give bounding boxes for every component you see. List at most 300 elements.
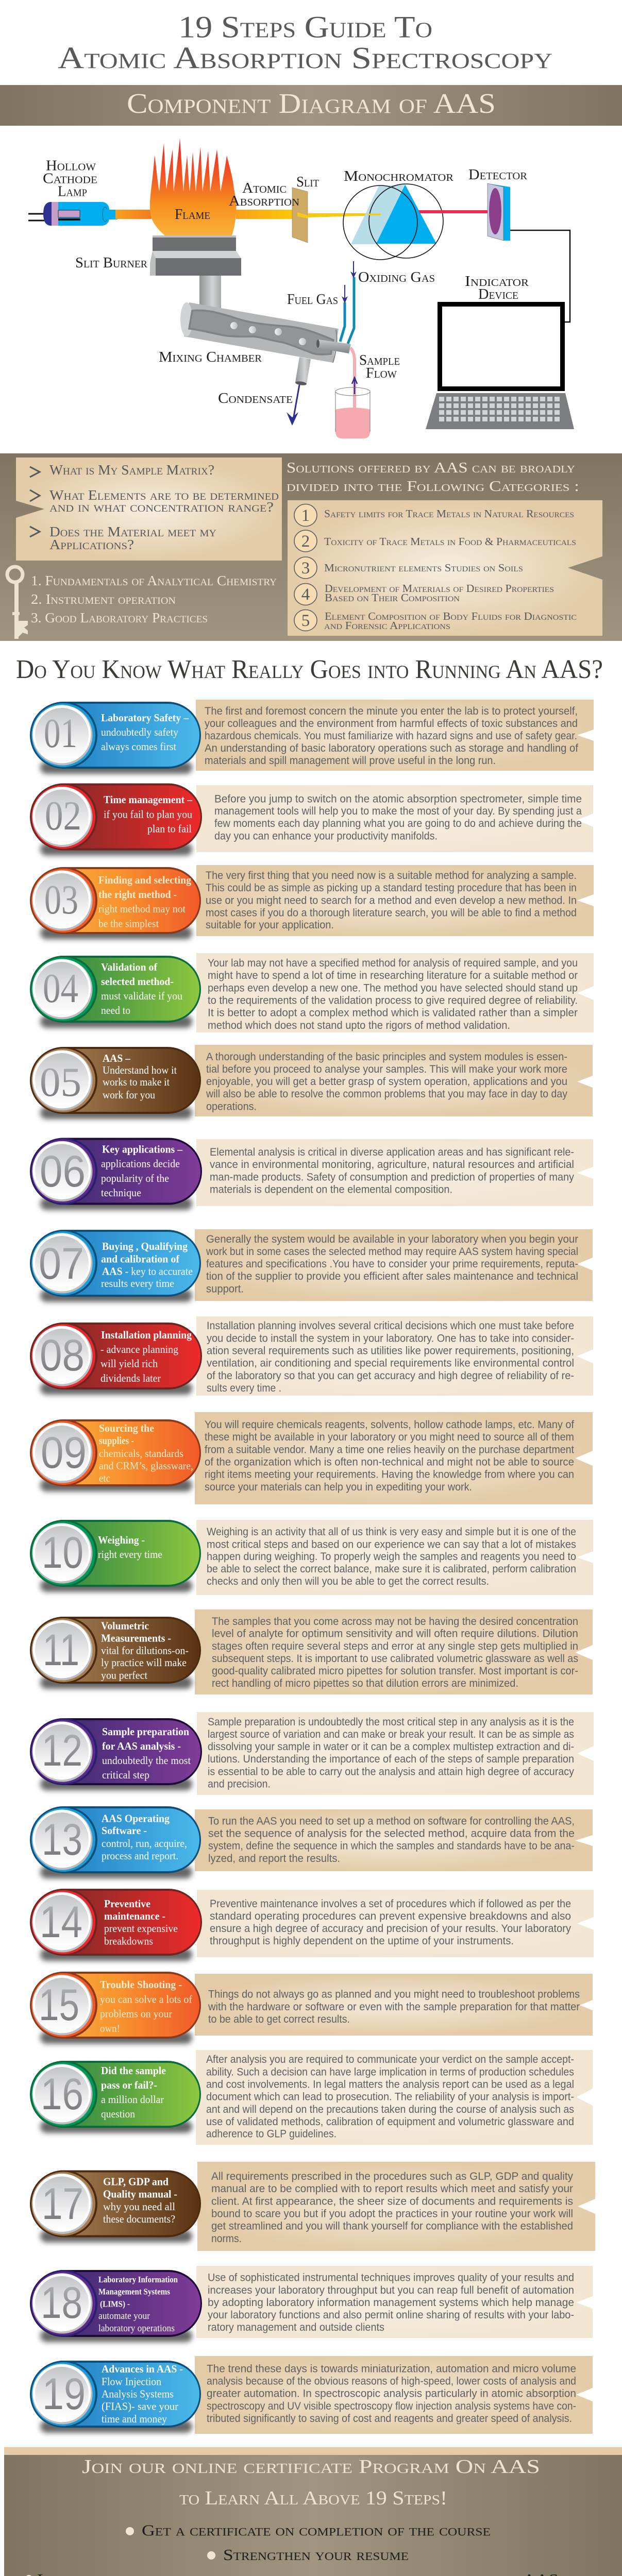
pipe: sample capillary (350, 348, 355, 412)
pill 18: (LIMS) - (100, 2299, 130, 2309)
pill 17 (30, 2170, 201, 2242)
pill 12: 12 (42, 1726, 82, 1775)
description 11: The samples that you come across may not be having the desired concentration (212, 1616, 578, 1628)
pill 01 (30, 702, 201, 774)
pill 12: Sample preparation (102, 1725, 189, 1738)
pill 17: Quality manual - (103, 2188, 177, 2200)
pill 05: AAS – (103, 1052, 130, 1064)
step 05 (30, 1045, 593, 1119)
description 05 (195, 1045, 593, 1116)
heading: do you know: Do You Know What Really Goes into Running An AAS? (16, 655, 603, 684)
description 18: your laboratory functions and also permit online sharing of results with your labo- (208, 2309, 574, 2321)
panel: solution categories (288, 500, 602, 636)
list: course benefits: Strengthen your resume (223, 2546, 409, 2564)
panel: solution categories: Development of Materials of Desired Properties (325, 582, 554, 595)
description 02 (196, 785, 593, 852)
pill 04: selected method- (101, 975, 174, 988)
pill 03: the right method - (98, 888, 177, 901)
diagram labels: Slit Burner (75, 255, 148, 271)
description 18: by adopting laboratory information management systems which help manage (208, 2297, 574, 2309)
description 12: and precision. (208, 1778, 271, 1790)
description 07: work but in some cases the selected method may require AAS system having special (206, 1246, 578, 1258)
step 08 (30, 1316, 593, 1396)
step 06 (30, 1138, 593, 1210)
pill 14 (30, 1889, 202, 1961)
diagram labels: Device (478, 286, 518, 302)
panel: solution categories: 5 (301, 612, 310, 630)
panel: solution categories: 1 (301, 506, 310, 525)
description 10: checks and only then will you be able to get the correct results. (207, 1575, 489, 1587)
description 07: tion of the supplier to provide you efficient after sales maintenance and technical (206, 1270, 578, 1282)
description 12: Sample preparation is undoubtedly the most critical step in any analysis as it is the (208, 1716, 574, 1728)
pill 07: results every time (101, 1277, 174, 1290)
pill 19: time and money (102, 2413, 167, 2425)
pill 16: pass or fail?- (101, 2079, 157, 2091)
pill 11: ly practice will make (101, 1656, 187, 1669)
pill 12: for AAS analysis - (102, 1740, 181, 1752)
description 08 (196, 1316, 593, 1396)
description 11: stages often require several steps and error at any single step gets multiplied in (212, 1640, 578, 1652)
diagram labels: Flow (366, 365, 397, 381)
description 17: All requirements prescribed in the procedures such as GLP, GDP and quality (211, 2171, 573, 2182)
description 13 (195, 1809, 593, 1871)
pill 04: Validation of (101, 961, 158, 973)
icon: key (7, 567, 28, 639)
icon: flame (150, 138, 236, 235)
description 08: you decide to install the system in your laboratory. One has to take into consider- (207, 1332, 574, 1345)
icon: sample beaker (335, 387, 370, 438)
pill 15: problems on your (100, 2007, 172, 2020)
pill 12: critical step (102, 1769, 149, 1781)
description 03 (196, 865, 594, 936)
description 07: Generally the system would be available in your laboratory when you begin your (206, 1233, 578, 1245)
description 19 (195, 2356, 593, 2434)
diagram labels: Detector (468, 166, 528, 183)
panel: key questions: Does the Material meet my (49, 524, 216, 539)
pill 19: (FIAS)- save your (102, 2400, 178, 2413)
diagram labels: Mixing Chamber (159, 349, 262, 365)
pill 14: Preventive (104, 1897, 150, 1910)
description 09: source your materials can help you in expediting your work. (205, 1481, 472, 1493)
title (58, 10, 552, 75)
description 13: To run the AAS you need to set up a method on software for controlling the AAS, (208, 1816, 575, 1827)
light beam: red (418, 210, 498, 213)
pill 08: will yield rich (100, 1357, 158, 1369)
description 17 (197, 2162, 595, 2251)
icon: slit (292, 188, 308, 243)
icon: monochromator (343, 184, 443, 260)
pill 01: Laboratory Safety – (101, 711, 189, 724)
description 04: It is better to adopt a complex method which is validated rather than a simpler (208, 1007, 578, 1019)
description 05: enjoyable, you will get a better grasp of system operation, applications and you (206, 1076, 567, 1088)
pill 19: Analysis Systems (102, 2387, 174, 2400)
pill 16: Did the sample (101, 2064, 166, 2077)
description 15: Things do not always go as planned and you might need to troubleshoot problems (208, 1989, 580, 2001)
diagram labels: Condensate (218, 390, 293, 406)
heading: join the program: Join our online certificate Program On AAS (82, 2456, 540, 2478)
step 01 (30, 700, 594, 774)
description 10: Weighing is an activity that all of us think is very easy and simple but it is one of the (207, 1526, 576, 1538)
description 18: increases your laboratory throughput but you can reap full benefit of automation (208, 2284, 574, 2296)
pill 05: Understand how it (103, 1064, 177, 1076)
step 16 (30, 2050, 593, 2145)
description 18: Use of sophisticated instrumental techniques improves quality of your results and (208, 2272, 574, 2284)
icon: indicator monitor (440, 304, 563, 388)
pill 19: Flow Injection (102, 2375, 161, 2387)
description 16: and cost involvements. In legal matters the analysis report can be used as a legal (206, 2078, 574, 2091)
description 16: After analysis you are required to communicate your verdict on the sample accept- (206, 2054, 574, 2065)
pill 10 (30, 1520, 201, 1592)
pill 02: plan to fail (147, 822, 192, 835)
step 14 (30, 1889, 594, 1961)
pill 06: Key applications – (102, 1143, 182, 1155)
description 11: good-quality calibrated micro pipettes for solution transfer. Most important is cor- (212, 1665, 578, 1677)
wire: detector to indicator (510, 230, 570, 322)
description 19: tributed significantly to saving of cost and reagents and greater speed of analysis. (207, 2413, 572, 2425)
description 08: ation several requirements such as utilities like power requirements, positioning, (207, 1345, 574, 1357)
icon: keyboard (426, 393, 574, 429)
description 02: Before you jump to switch on the atomic absorption spectrometer, simple time (214, 793, 582, 805)
pill 10: 10 (42, 1528, 83, 1578)
heading: solutions: divided into the Following Categories : (287, 478, 579, 495)
description 06: Elemental analysis is critical in diverse application areas and has significant rele- (210, 1146, 574, 1158)
pipes: fuel and oxidant (340, 277, 354, 344)
pill 04: 04 (43, 966, 78, 1011)
description 16 (196, 2050, 593, 2145)
pill 13: Software - (102, 1824, 147, 1837)
description 10: happen during weighing. To properly weigh the samples and reagents you need to (207, 1551, 576, 1563)
pill 15: you can solve a lots of (100, 1993, 192, 2005)
pill 14: prevent expensive (104, 1922, 178, 1935)
description 06 (196, 1139, 593, 1206)
panel: solution categories: 2 (301, 532, 310, 551)
description 06: materials is dependent on the elemental composition. (210, 1184, 452, 1195)
icon: detector (487, 183, 510, 241)
pill 03 (30, 867, 201, 939)
pill 08: Installation planning (101, 1329, 192, 1341)
panel: key questions: and in what concentration range? (49, 499, 274, 515)
pill 07: and calibration of (101, 1253, 180, 1265)
pill 11: Measurements - (101, 1632, 171, 1645)
step 03 (30, 865, 594, 939)
description 17: client. At first appearance, the sheer size of documents and requirements is (211, 2196, 573, 2207)
description 02: few moments each day planning what you are going to do and achieve during the (214, 818, 582, 829)
pill 13: process and report. (102, 1850, 178, 1862)
panel: solution categories: Safety limits for Trace Metals in Natural Resources (324, 507, 574, 520)
pill 13: AAS Operating (102, 1812, 170, 1825)
description 17: manual are to be complied with to report results which meet and satisfy your (211, 2183, 573, 2195)
description 09: these might be available in your laboratory or you might need to source all of them (205, 1431, 574, 1443)
panel: key questions: Applications? (49, 537, 134, 552)
pill 02: 02 (45, 793, 81, 839)
description 09: You will require chemicals reagents, solvents, hollow cathode lamps, etc. Many of (205, 1419, 574, 1431)
pill 08: 08 (40, 1331, 85, 1380)
pill 07: 07 (39, 1239, 84, 1289)
step 07 (30, 1229, 593, 1302)
arrow: condensate drain (287, 385, 299, 426)
pill 13: 13 (42, 1815, 82, 1865)
pill 07: Buying , Qualifying (102, 1240, 188, 1252)
pill 19: 19 (42, 2369, 86, 2419)
pill 09: supplies - (99, 1434, 134, 1447)
description 04: perhaps even develop a new one. The method you have selected should stand up (208, 982, 578, 994)
pill 04 (30, 956, 201, 1028)
description 12: largest source of variation and can make or break your result. It can be as simple as (208, 1728, 574, 1740)
pill 14: 14 (40, 1897, 82, 1947)
pill 12 (30, 1718, 202, 1790)
arrows: gas inflow (345, 261, 354, 302)
description 12 (197, 1712, 594, 1795)
pill 18: automate your (98, 2311, 150, 2321)
pill 17: 17 (42, 2179, 83, 2229)
description 17: get streamlined and you will thank yourself for compliance with the established (211, 2221, 573, 2232)
step 10 (30, 1520, 593, 1595)
step 09 (30, 1412, 593, 1504)
icon: burner stem (199, 276, 221, 313)
pill 05 (30, 1047, 201, 1119)
pill 16 (30, 2061, 201, 2133)
step 12 (30, 1712, 594, 1795)
step 18 (30, 2266, 593, 2342)
pill 11: vital for dilutions-on- (101, 1645, 189, 1657)
description 12: lutions. Understanding the importance of each of the steps of sample preparation (208, 1753, 574, 1765)
pill 18: Laboratory Information (98, 2275, 178, 2284)
panel: questions and solutions (0, 453, 622, 641)
diagram labels: Monochromator (344, 168, 454, 184)
heading: solutions (287, 460, 579, 495)
panel: key questions (16, 457, 282, 561)
pill 11 (30, 1617, 201, 1689)
icon: mixing chamber (180, 302, 351, 363)
pill 19 (30, 2361, 201, 2433)
description 19: analysis because of the obvious reasons of high-speed, lower costs of analysis and (207, 2375, 576, 2387)
heading: join the program (82, 2456, 540, 2509)
pill 14: breakdowns (104, 1935, 153, 1947)
pill 06: applications decide (101, 1157, 180, 1170)
description 15: to be able to get correct results. (208, 2013, 350, 2025)
pill 08: dividends later (100, 1372, 161, 1384)
description 04: to the requirements of the validation process to give required degree of reliability. (208, 994, 578, 1007)
pill 09: 09 (41, 1428, 87, 1478)
pill 09: and CRM’s, glassware, (99, 1460, 193, 1472)
pill 18: Management Systems (98, 2286, 170, 2297)
pill 16: a million dollar (101, 2093, 164, 2106)
description 01: your colleagues and the environment from harmful effects of toxic substances and (205, 718, 578, 730)
list: core skills (31, 573, 277, 625)
pill 03: be the simplest (98, 917, 159, 929)
pill 17: why you need all (103, 2200, 175, 2213)
pill 15: Trouble Shooting - (100, 1978, 182, 1991)
description 19: The trend these days is towards miniaturization, automation and micro volume (207, 2363, 576, 2375)
description 11 (195, 1609, 593, 1694)
pill 04: must validate if you (101, 990, 182, 1002)
pill 19: Advances in AAS - (102, 2363, 183, 2375)
description 12: is essential to be able to carry out the analysis and attain high degree of accuracy (208, 1766, 574, 1777)
pill 03: 03 (44, 877, 78, 923)
list: course benefits (25, 2521, 596, 2576)
panel: key questions: What Elements are to be determined (49, 487, 279, 503)
pill 05: 05 (40, 1060, 81, 1105)
diagram labels: Lamp (58, 183, 87, 200)
title: Atomic Absorption Spectroscopy (58, 41, 552, 75)
description 16: adherence to GLP guidelines. (206, 2128, 337, 2140)
description 07: support. (206, 1283, 244, 1295)
description 07 (195, 1229, 593, 1301)
pill 08 (30, 1323, 202, 1395)
pill 17: GLP, GDP and (103, 2175, 169, 2188)
panel: solution categories: 4 (301, 585, 310, 604)
description 01: The first and foremost concern the minute you enter the lab is to protect yourself, (205, 705, 578, 717)
description 06: man-made products. Safety of consumption and prediction of properties of many (210, 1172, 574, 1183)
pill 07 (30, 1230, 201, 1302)
pill 16: question (101, 2108, 135, 2120)
pill 01: 01 (44, 711, 77, 756)
description 10 (196, 1520, 593, 1595)
pill 07: AAS - key to accurate (102, 1265, 193, 1278)
title: 19 Steps Guide To (178, 10, 432, 44)
pill 02 (30, 783, 202, 855)
description 03: This could be as simple as picking up a standard testing procedure that has been in (206, 882, 577, 894)
description 09 (195, 1412, 593, 1504)
pill 01: always comes first (101, 740, 176, 753)
step 17 (30, 2162, 595, 2251)
description 14: throughput is highly dependent on the uptime of your instruments. (210, 1935, 514, 1947)
description 16: ant and will depend on the precautions taken during the course of analysis such as (206, 2104, 574, 2115)
diagram labels: Oxiding Gas (358, 269, 435, 285)
list: core skills: 1. Fundamentals of Analytical Chemistry (31, 573, 277, 588)
pill 03: Finding and selecting (98, 874, 191, 886)
step 11 (30, 1609, 593, 1694)
description 19: greater automation. In spectroscopic analysis particularly in atomic absorption (207, 2388, 576, 2400)
section banner: component diagram (0, 85, 622, 126)
panel: solution categories: Micronutrient elements Studies on Soils (324, 562, 523, 574)
heading: solutions: Solutions offered by AAS can be broadly (287, 460, 575, 476)
diagram labels: Hollow (46, 158, 96, 174)
pill 06: popularity of the (101, 1172, 169, 1184)
description 04 (196, 953, 594, 1032)
pill 17: these documents? (103, 2213, 175, 2225)
pill 02: if you fail to plan you (104, 808, 192, 820)
panel: solution categories: and Forensic Applications (324, 619, 450, 632)
pill 09: chemicals, standards (99, 1447, 183, 1460)
pill 05: work for you (103, 1089, 155, 1101)
description 05: A thorough understanding of the basic principles and system modules is essen- (206, 1051, 567, 1063)
description 18: ratory management and outside clients (208, 2321, 384, 2333)
description 08: ventilation, air conditioning and special requirements like environmental control (207, 1357, 574, 1369)
pill 10: Weighing - (98, 1534, 145, 1546)
diagram labels: Indicator (465, 273, 529, 290)
description 03: suitable for your application. (206, 919, 334, 931)
description 01: materials and spill management will prove useful in the long run. (205, 755, 496, 767)
description 16: use of validated methods, calibration of equipment and volumetric glassware and (206, 2116, 574, 2128)
description 11: level of analyte for optimum sensitivity and will often require dilutions. Dilution (212, 1628, 578, 1640)
step 02 (30, 783, 593, 855)
diagram labels: Absorption (229, 193, 299, 209)
heading: join the program: to Learn All Above 19 Steps! (179, 2487, 447, 2509)
description 11: subsequent steps. It is important to use calibrated volumetric glassware as well as (212, 1653, 578, 1665)
panel: solution categories: Toxicity of Trace Metals in Food & Pharmaceuticals (324, 535, 576, 548)
pill 14: maintenance - (104, 1910, 165, 1922)
description 11: rect handling of micro pipettes so that dilution errors are minimized. (212, 1677, 518, 1689)
pill 16: 16 (41, 2070, 83, 2119)
panel: solution categories: 3 (301, 559, 310, 578)
pill 13: control, run, acquire, (102, 1837, 187, 1850)
description 18 (196, 2266, 593, 2338)
arrow: sample flow (352, 378, 357, 394)
pill 11: you perfect (101, 1669, 147, 1682)
pill 10: right every time (98, 1548, 162, 1561)
description 10: be able to select the correct balance, make sure it is calibrated, perform calibration (207, 1563, 576, 1575)
panel: key questions: What is My Sample Matrix? (49, 462, 214, 478)
pill 09: etc (99, 1472, 110, 1484)
list: core skills: 3. Good Laboratory Practices (31, 610, 208, 625)
pill 12: undoubtedly the most (102, 1754, 191, 1767)
pill 06: technique (101, 1187, 141, 1199)
pill 18: 18 (41, 2278, 82, 2328)
step 19 (30, 2356, 593, 2434)
description 13: system, define the sequence in which the samples and standards have to be ana- (208, 1840, 575, 1852)
pill 15 (30, 1972, 201, 2044)
description 02: management tools will help you to make the most of your day. By spending just a (214, 805, 582, 817)
description 14: standard operating procedures can prevent expensive breakdowns and also (210, 1910, 571, 1922)
panel: solution categories: Element Composition of Body Fluids for Diagnostic (325, 610, 577, 622)
description 14: ensure a high degree of accuracy and precision of your results. Your laboratory (210, 1923, 571, 1935)
description 16: document which can lead to prosecution. The reliability of your analysis is import- (206, 2091, 574, 2103)
pill 18: laboratory operations (98, 2323, 175, 2334)
pill 18 (30, 2270, 202, 2342)
diagram labels: Fuel Gas (287, 291, 338, 308)
description 01: hazardous chemicals. You must familiarize with hazard signs and use of safety gear. (205, 730, 577, 742)
description 16: ability. Such a decision can have large implication in terms of production schedules (206, 2066, 574, 2078)
diagram labels: Sample (359, 352, 400, 368)
description 04: might have to spend a lot of time in researching literature for a suitable method or (208, 970, 578, 981)
arrow heads (342, 272, 357, 303)
light beam: through slit (297, 212, 381, 218)
description 15 (195, 1974, 593, 2036)
description 04: Your lab may not have a specified method for analysis of required sample, and you (208, 957, 578, 969)
panel: solution categories: Based on Their Composition (325, 591, 460, 604)
pill 08: - advance planning (100, 1343, 178, 1355)
section banner: component diagram: Component Diagram of AAS (127, 88, 496, 119)
diagram labels: Flame (175, 206, 210, 223)
list: course benefits: Get a certificate on completion of the course (142, 2521, 491, 2539)
description 05: tial before you proceed to analyse your samples. This will make your work more (206, 1063, 567, 1075)
description 01 (196, 700, 594, 771)
description 03: use or you might need to search for a method and even develop a new method. In (206, 894, 577, 907)
step 13 (30, 1806, 593, 1878)
pill 15: own! (100, 2022, 120, 2035)
description 04: method which does not stand upto the rigors of method validation. (208, 1020, 510, 1031)
icon: drain pipe (295, 357, 311, 386)
description 03: most cases if you do a thorough literature search, you will be able to find a method (206, 907, 577, 919)
description 09: right items meeting your requirements. Having the knowledge from where you can (205, 1469, 574, 1481)
description 06: vance in environmental monitoring, agriculture, natural resources and artificial (210, 1159, 574, 1171)
icon: hollow cathode lamp (28, 202, 117, 226)
light beam: left (115, 210, 152, 219)
pill 11: Volumetric (101, 1620, 149, 1632)
pill 05: works to make it (103, 1076, 170, 1088)
description 13: lyzed, and report the results. (208, 1853, 340, 1865)
description 08: of the laboratory so that you can get accuracy and high degree of reliability of re- (207, 1370, 574, 1382)
pill 09: Sourcing the (99, 1422, 154, 1434)
component diagram of AAS (28, 138, 574, 438)
description 17: bound to scare you but if you adopt the practices in your routine your work will (211, 2208, 573, 2219)
description 12: dissolving your sample in water or it can be a complex multistep extraction and di- (208, 1741, 574, 1753)
icon: slit burner (150, 235, 241, 276)
diagram labels (43, 158, 529, 406)
description 03: The very first thing that you need now is a suitable method for analyzing a sample. (206, 870, 577, 882)
description 07: features and specifications .You have to consider your prime requirements, reputa- (206, 1258, 578, 1270)
